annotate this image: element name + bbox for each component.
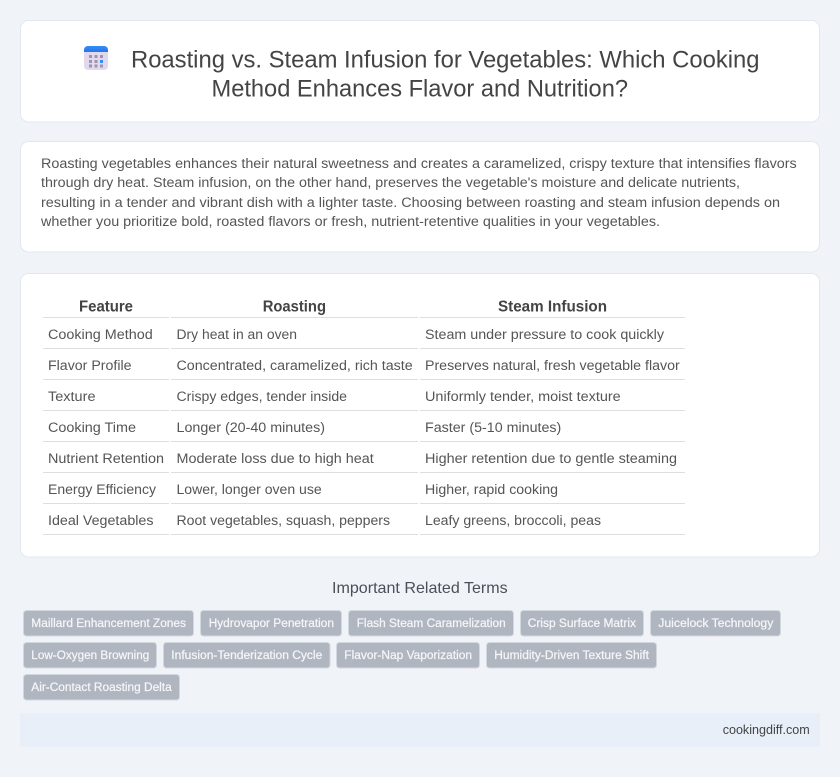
- text block: introduction paragraph: resulting in a tender and vibrant dish with a lighter taste. Choosing between roasting and steam infusion depends on: [41, 195, 780, 211]
- table row: energy efficiency: [48, 482, 558, 498]
- text block: introduction paragraph: [40, 156, 797, 230]
- tag: Low-Oxygen Browning: Low-Oxygen Browning: [31, 648, 149, 662]
- table header: Feature: [79, 298, 133, 316]
- tag: Flash Steam Caramelization: Flash Steam Caramelization: [357, 616, 506, 630]
- table row: ideal vegetables: [48, 513, 601, 529]
- table row: texture: [48, 389, 621, 405]
- table row: flavor profile: Concentrated, caramelized, rich taste: [176, 358, 413, 374]
- icon: calendar: [84, 46, 108, 70]
- table row: nutrient retention: Moderate loss due to high heat: [176, 451, 374, 467]
- heading: important related terms: Important Related Terms: [332, 580, 508, 597]
- table row: cooking time: [48, 420, 561, 436]
- table row: cooking time: Longer (20-40 minutes): [176, 420, 325, 436]
- panel: comparison table: [20, 274, 820, 557]
- tag: Air-Contact Roasting Delta: Air-Contact Roasting Delta: [31, 680, 172, 694]
- table row: ideal vegetables: Root vegetables, squash, peppers: [176, 513, 390, 529]
- table row: texture: Uniformly tender, moist texture: [425, 389, 621, 405]
- table row: flavor profile: Flavor Profile: [48, 358, 132, 374]
- text block: introduction paragraph: Roasting vegetables enhances their natural sweetness and creates a caramelized, crispy texture that intensifies flavors: [41, 156, 797, 172]
- title: [131, 46, 760, 102]
- table row: cooking method: Dry heat in an oven: [176, 327, 297, 343]
- table row: cooking method: Cooking Method: [48, 327, 153, 343]
- tag: Humidity-Driven Texture Shift: Humidity-Driven Texture Shift: [494, 648, 650, 662]
- tag: Infusion-Tenderization Cycle: [164, 642, 330, 668]
- text block: introduction paragraph: through dry heat. Steam infusion, on the other hand, preserves the vegetable's moisture and delicate nutrients,: [41, 175, 740, 191]
- tag: Flavor-Nap Vaporization: [336, 642, 480, 668]
- table row: ideal vegetables: Ideal Vegetables: [48, 513, 154, 529]
- tag: Infusion-Tenderization Cycle: Infusion-Tenderization Cycle: [171, 648, 323, 662]
- table row: texture: Crispy edges, tender inside: [176, 389, 347, 405]
- tag: Flavor-Nap Vaporization: Flavor-Nap Vaporization: [344, 648, 472, 662]
- tag: Hydrovapor Penetration: Hydrovapor Penetration: [209, 616, 334, 630]
- title: Roasting vs. Steam Infusion for Vegetables: Which Cooking: [131, 46, 760, 74]
- title: Method Enhances Flavor and Nutrition?: [212, 76, 628, 102]
- table row: nutrient retention: [48, 451, 677, 467]
- table row: cooking time: Cooking Time: [48, 420, 136, 436]
- tag: Air-Contact Roasting Delta: [24, 674, 180, 700]
- table row: flavor profile: Preserves natural, fresh vegetable flavor: [425, 358, 680, 374]
- table row: nutrient retention: Higher retention due to gentle steaming: [425, 451, 677, 467]
- text block: introduction paragraph: whether you prioritize bold, roasted flavors or fresh, nutrient-retentive qualities in your vegetables.: [40, 214, 660, 230]
- tag: Crisp Surface Matrix: Crisp Surface Matrix: [528, 616, 636, 630]
- table row: cooking time: Faster (5-10 minutes): [425, 420, 561, 436]
- table row: texture: Texture: [48, 389, 96, 405]
- footer: [20, 713, 820, 747]
- footer: cookingdiff.com: [723, 722, 810, 737]
- table header: [79, 298, 607, 316]
- table row: flavor profile: [48, 358, 680, 374]
- tag: Maillard Enhancement Zones: Maillard Enhancement Zones: [31, 616, 186, 630]
- tag: Hydrovapor Penetration: [200, 610, 342, 636]
- tag: Low-Oxygen Browning: [24, 642, 156, 668]
- tag: Flash Steam Caramelization: [348, 610, 514, 636]
- table header: Roasting: [263, 298, 326, 316]
- table row: nutrient retention: Nutrient Retention: [48, 451, 164, 467]
- tag: Crisp Surface Matrix: [520, 610, 644, 636]
- tag: Maillard Enhancement Zones: [24, 610, 194, 636]
- table row: cooking method: Steam under pressure to cook quickly: [425, 327, 665, 343]
- table row: energy efficiency: Lower, longer oven use: [176, 482, 322, 498]
- table row: cooking method: [48, 327, 665, 343]
- tag: Juicelock Technology: Juicelock Technology: [658, 616, 774, 630]
- tag: Juicelock Technology: [650, 610, 780, 636]
- table row: ideal vegetables: Leafy greens, broccoli, peas: [425, 513, 601, 529]
- panel: title card: [20, 20, 820, 122]
- tag: Humidity-Driven Texture Shift: [486, 642, 656, 668]
- tag group: related terms: [24, 610, 780, 700]
- table row: energy efficiency: Higher, rapid cooking: [425, 482, 558, 498]
- table row: energy efficiency: Energy Efficiency: [48, 482, 157, 498]
- table header: Steam Infusion: [498, 298, 607, 316]
- panel: introduction: [20, 142, 820, 252]
